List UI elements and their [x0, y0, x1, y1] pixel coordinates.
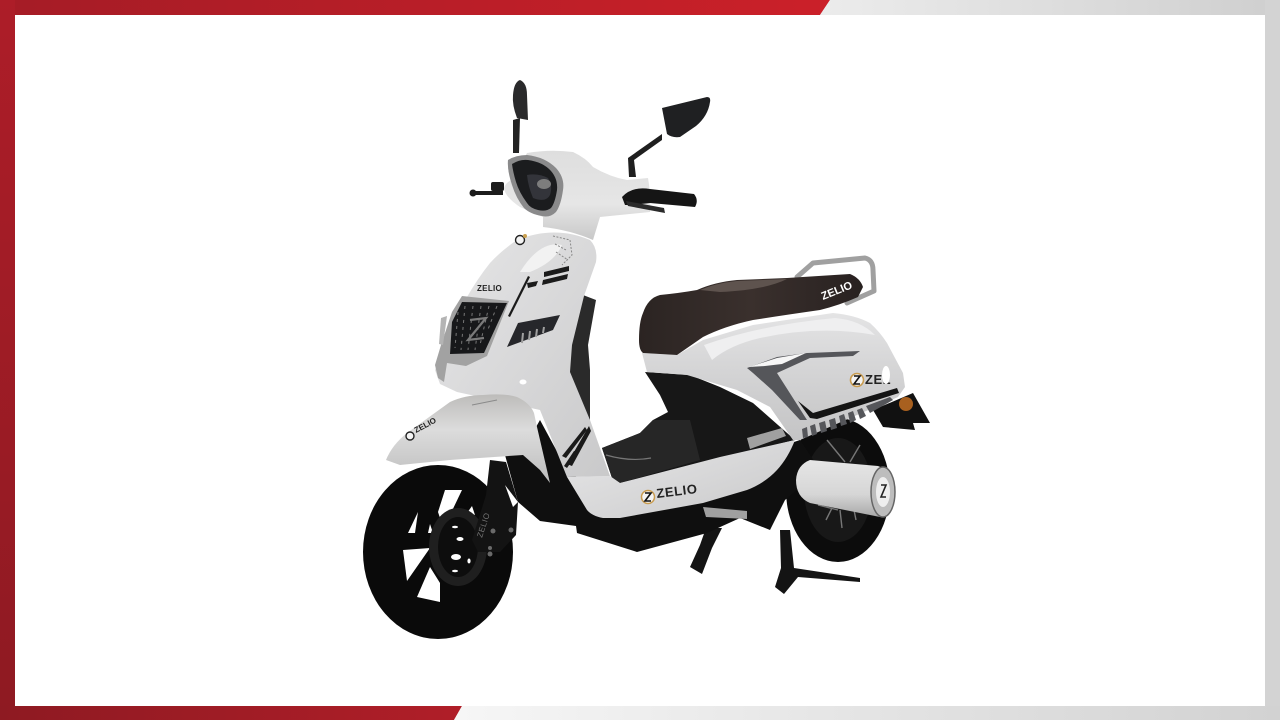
shield sticker marks: [553, 236, 572, 265]
mudguard and tail reflector: [873, 393, 930, 430]
fork label: ZELIO: [475, 511, 492, 539]
rear wheel: [786, 418, 890, 562]
front wheel: [363, 460, 518, 639]
rear rack: [797, 258, 874, 303]
seat: [639, 274, 863, 355]
motor cylinder: [796, 460, 895, 517]
front fender: [386, 394, 550, 483]
side panel wordmark: ZELIO: [656, 481, 698, 501]
footrest: [703, 507, 747, 519]
highlight: [520, 380, 526, 384]
frame: bottom red bar: [0, 706, 462, 720]
centre stand: [775, 530, 860, 594]
rear wordmark: ZEL: [865, 372, 891, 387]
left indicator: [439, 316, 447, 345]
left mirror: [513, 80, 528, 120]
side stand: [690, 528, 722, 574]
side panel logo: [642, 490, 654, 504]
right mirror: [662, 97, 710, 137]
front shield: [435, 232, 610, 477]
shield small logo: [516, 234, 527, 244]
seat wordmark: ZELIO: [820, 279, 855, 303]
rear body panel: [642, 313, 905, 440]
rear highlight: [882, 366, 890, 384]
shield lower stripes: [562, 426, 591, 468]
frame: top grey bar: [820, 0, 1280, 15]
frame: left red bar: [0, 0, 15, 720]
left mirror stem: [513, 118, 520, 153]
grille: [450, 302, 507, 354]
frame: top red bar: [0, 0, 830, 15]
fender logo: [406, 432, 414, 440]
rear logo: [850, 374, 864, 386]
headlight: [508, 155, 563, 216]
vent squares: [802, 397, 893, 438]
black stripe: [798, 388, 899, 419]
lower side panel: [567, 440, 795, 518]
upper body gloss band: [704, 318, 875, 360]
gap beside fork: [505, 485, 518, 507]
handlebar grip: [622, 188, 697, 213]
chassis underside: [505, 420, 820, 552]
fender wordmark: ZELIO: [413, 416, 438, 435]
shield stripes: [508, 266, 569, 317]
shield wordmark: ZELIO: [477, 284, 502, 293]
frame: bottom grey bar: [454, 706, 1280, 720]
fork: [472, 460, 518, 552]
grille bezel: [435, 296, 509, 382]
wheel openings: [403, 490, 475, 602]
left lever: [470, 182, 504, 196]
inner shield column: [567, 295, 596, 420]
floor and under-seat panel: [602, 372, 795, 483]
right mirror stem: [628, 134, 662, 177]
brake disc: [429, 508, 487, 586]
head unit: [470, 80, 710, 240]
caliper bolts: [488, 528, 514, 556]
scooter illustration: [363, 80, 930, 639]
chrome chevron trim: [747, 351, 860, 420]
side vent: [507, 315, 560, 347]
shield gloss: [520, 244, 562, 272]
frame: right grey bar: [1265, 0, 1280, 720]
